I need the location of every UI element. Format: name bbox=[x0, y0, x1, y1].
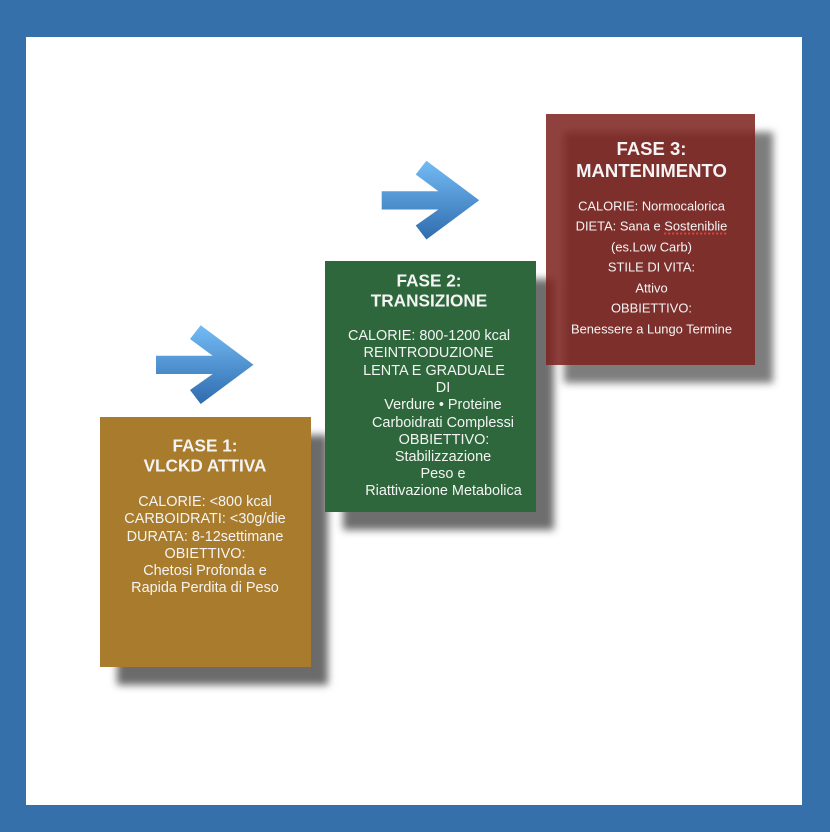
heading: fase 3: FASE 3: bbox=[617, 138, 686, 158]
text: fase 2 details: Peso e bbox=[421, 466, 465, 482]
text: fase 2 details bbox=[348, 328, 522, 499]
text: fase 1 details: CALORIE: <800 kcal bbox=[138, 494, 272, 510]
panel 3 shadow bbox=[564, 132, 773, 383]
text: fase 1 details: OBIETTIVO: bbox=[164, 546, 246, 562]
text: fase 2 details: CALORIE: 800-1200 kcal bbox=[348, 328, 510, 344]
text: fase 2 details: REINTRODUZIONE bbox=[364, 345, 493, 361]
text: fase 2 details: OBBIETTIVO: bbox=[399, 432, 489, 448]
text: fase 3 details bbox=[571, 198, 732, 336]
panel 2 shadow bbox=[343, 279, 554, 530]
text: fase 2 details: DI bbox=[436, 380, 450, 396]
heading: fase 3: MANTENIMENTO bbox=[576, 160, 727, 181]
text: fase 2 details: Riattivazione Metabolica bbox=[365, 483, 522, 499]
text: fase 1 details: CARBOIDRATI: <30g/die bbox=[124, 511, 286, 527]
text: fase 2 details: Stabilizzazione bbox=[395, 449, 491, 465]
text: fase 1 details: DURATA: 8-12settimane bbox=[127, 528, 283, 544]
text: fase 3 details: DIETA: Sana e Sosteniblie bbox=[576, 218, 727, 234]
text: fase 1 details: Rapida Perdita di Peso bbox=[131, 580, 279, 596]
heading: fase 1: FASE 1: bbox=[173, 435, 237, 455]
panel: fase 2 bbox=[325, 261, 536, 512]
text: fase 3 details: STILE DI VITA: bbox=[608, 260, 695, 274]
text: fase 2 details: Verdure • Proteine bbox=[384, 397, 502, 413]
text: fase 2 details: LENTA E GRADUALE bbox=[363, 362, 505, 378]
panel: fase 3 bbox=[546, 114, 755, 365]
text: fase 2 details: Carboidrati Complessi bbox=[372, 414, 514, 430]
heading: fase 2 bbox=[370, 270, 487, 310]
text: fase 3 details: Attivo bbox=[635, 280, 668, 296]
heading: fase 2: TRANSIZIONE bbox=[371, 290, 487, 310]
heading: fase 3 bbox=[576, 138, 727, 181]
heading: fase 2: FASE 2: bbox=[397, 270, 461, 290]
panel 1 shadow bbox=[117, 435, 328, 685]
text: fase 1 details: Chetosi Profonda e bbox=[143, 563, 267, 579]
text: fase 1 details bbox=[124, 494, 286, 596]
text: fase 3 details: Benessere a Lungo Termine bbox=[571, 322, 732, 336]
text: fase 3 details: (es.Low Carb) bbox=[611, 240, 692, 254]
text: fase 3 details: CALORIE: Normocalorica bbox=[578, 198, 725, 213]
panel: fase 1 bbox=[100, 417, 311, 667]
heading: fase 1: VLCKD ATTIVA bbox=[144, 456, 266, 476]
text: fase 3 details: OBBIETTIVO: bbox=[611, 300, 692, 316]
heading: fase 1 bbox=[144, 435, 266, 476]
